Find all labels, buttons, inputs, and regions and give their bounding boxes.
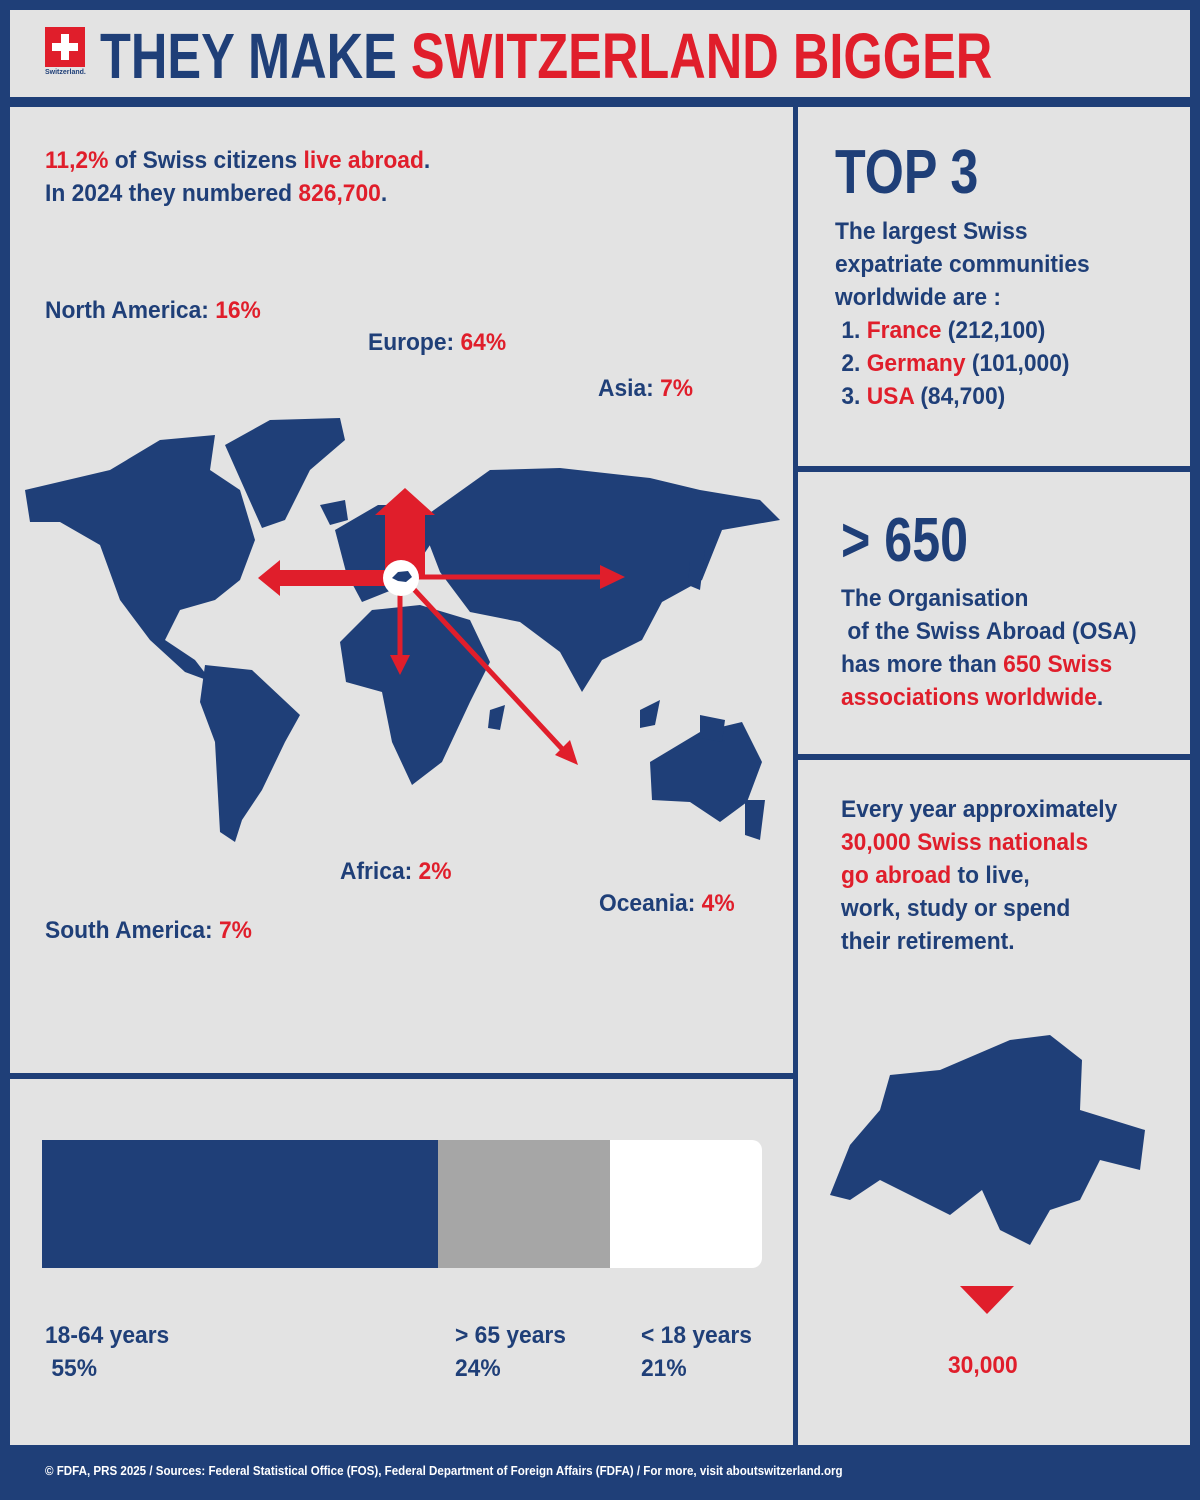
emigration text: work, study or spend [841, 895, 1070, 922]
label: Europe: Europe: 64% [368, 329, 506, 356]
title: THEY MAKE SWITZERLAND BIGGER [100, 20, 992, 92]
top 3 list: 3. USA (84,700) [841, 383, 1005, 410]
label <18 [641, 1322, 752, 1382]
label: Africa: Africa: 2% [340, 858, 452, 885]
intro text [45, 147, 430, 207]
OSA text: of the Swiss Abroad (OSA) [847, 618, 1137, 645]
intro text: In 2024 they numbered 826,700. [45, 180, 387, 207]
value 30,000: 30,000 [948, 1352, 1018, 1379]
stacked bar [42, 1140, 762, 1268]
top 3 list: expatriate communities [835, 251, 1090, 278]
label >65 [455, 1322, 566, 1382]
header panel [10, 10, 1190, 97]
label <18: < 18 years [641, 1322, 752, 1349]
OSA text: The Organisation [841, 585, 1028, 612]
panel: OSA [798, 472, 1190, 754]
footer: © FDFA, PRS 2025 / Sources: Federal Statistical Office (FOS), Federal Department of Foreign Affairs (FDFA) / For more, visit aboutswitzerland.org [45, 1463, 843, 1478]
panel: top 3 [798, 107, 1190, 466]
emigration text [841, 796, 1118, 955]
panel: annual emigration [798, 760, 1190, 1445]
label: North America: North America: 16% [45, 297, 261, 324]
arrows [258, 488, 625, 765]
label >65: 24% [455, 1355, 501, 1382]
top 3 list: 2. Germany (101,000) [841, 350, 1069, 377]
emigration text: their retirement. [841, 928, 1015, 955]
top 3 list: worldwide are : [835, 284, 1001, 311]
emigration text: Every year approximately [841, 796, 1117, 823]
heading: TOP 3: TOP 3 [835, 138, 978, 207]
emigration text: 30,000 Swiss nationals [841, 829, 1088, 856]
label >65: > 65 years [455, 1322, 566, 1349]
emigration text: go abroad to live, [841, 862, 1030, 889]
label: South America: South America: 7% [45, 917, 252, 944]
top 3 list: 1. France (212,100) [841, 317, 1045, 344]
heading: >650: > 650 [841, 506, 968, 575]
panel: map [10, 107, 793, 1073]
panel: age [10, 1079, 793, 1445]
label 18-64: 18-64 years [45, 1322, 169, 1349]
OSA text: has more than 650 Swiss [841, 651, 1112, 678]
logo: Switzerland. [45, 69, 86, 76]
switzerland map [830, 1035, 1145, 1245]
icon: down triangle [960, 1286, 1014, 1314]
top 3 list [835, 218, 1090, 410]
world map [25, 418, 780, 842]
intro text: 11,2% of Swiss citizens live abroad. [45, 147, 430, 174]
OSA text: associations worldwide. [841, 684, 1103, 711]
label 18-64 [45, 1322, 169, 1382]
logo [45, 27, 86, 76]
label: Asia: Asia: 7% [598, 375, 693, 402]
label <18: 21% [641, 1355, 687, 1382]
OSA text [841, 585, 1137, 711]
top 3 list: The largest Swiss [835, 218, 1028, 245]
label 18-64: 55% [51, 1355, 97, 1382]
label: Oceania: Oceania: 4% [599, 890, 735, 917]
